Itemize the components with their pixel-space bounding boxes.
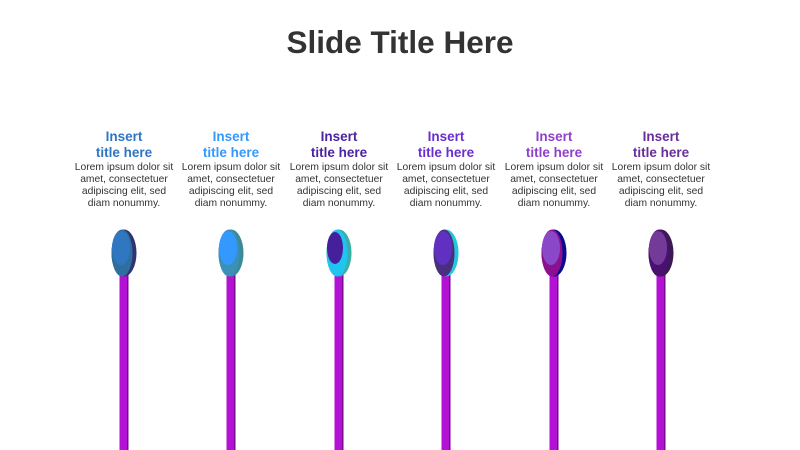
text block 1: title here [96, 145, 152, 160]
text block 4: Insert [428, 129, 464, 144]
text block 1: Insert [106, 129, 142, 144]
pin 2 [218, 230, 244, 450]
pin 3 [326, 230, 352, 450]
text block 1: diam nonummy. [88, 198, 160, 209]
text block 1: Lorem ipsum dolor sit [75, 162, 173, 173]
text block 5: amet, consectetuer [510, 174, 598, 185]
text block 2: title here [203, 145, 259, 160]
text block 1 [75, 129, 174, 209]
text block 6: amet, consectetuer [617, 174, 705, 185]
text block 6: adipiscing elit, sed [619, 186, 703, 197]
text block 4: adipiscing elit, sed [404, 186, 488, 197]
text block 6 [612, 129, 710, 209]
text block 5 [505, 129, 604, 209]
pin 5 [542, 230, 566, 450]
text block 2: adipiscing elit, sed [189, 186, 273, 197]
text block 3 [290, 129, 388, 209]
text block 3: adipiscing elit, sed [297, 186, 381, 197]
text block 2 [182, 129, 280, 209]
text block 2: amet, consectetuer [187, 174, 275, 185]
text block 2: Insert [213, 129, 249, 144]
text block 6: Lorem ipsum dolor sit [612, 162, 710, 173]
text block 3: title here [311, 145, 367, 160]
text block 4 [397, 129, 496, 209]
text block 5: adipiscing elit, sed [512, 186, 596, 197]
text block 2: diam nonummy. [195, 198, 267, 209]
text block 1: adipiscing elit, sed [82, 186, 166, 197]
text block 3: diam nonummy. [303, 198, 375, 209]
text block 5: Lorem ipsum dolor sit [505, 162, 603, 173]
title: Slide Title Here [286, 24, 514, 60]
pin 4 [434, 230, 458, 450]
text block 4: Lorem ipsum dolor sit [397, 162, 495, 173]
text block 6: diam nonummy. [625, 198, 697, 209]
text block 3: Lorem ipsum dolor sit [290, 162, 388, 173]
text block 3: amet, consectetuer [295, 174, 383, 185]
pin 6 [648, 230, 674, 450]
text block 3: Insert [321, 129, 357, 144]
text block 4: diam nonummy. [410, 198, 482, 209]
pin 1 [112, 230, 136, 450]
text block 6: title here [633, 145, 689, 160]
text block 4: amet, consectetuer [402, 174, 490, 185]
text block 2: Lorem ipsum dolor sit [182, 162, 280, 173]
text block 4: title here [418, 145, 474, 160]
text block 1: amet, consectetuer [80, 174, 168, 185]
text block 5: Insert [536, 129, 572, 144]
text block 6: Insert [643, 129, 679, 144]
text block 5: title here [526, 145, 582, 160]
text block 5: diam nonummy. [518, 198, 590, 209]
